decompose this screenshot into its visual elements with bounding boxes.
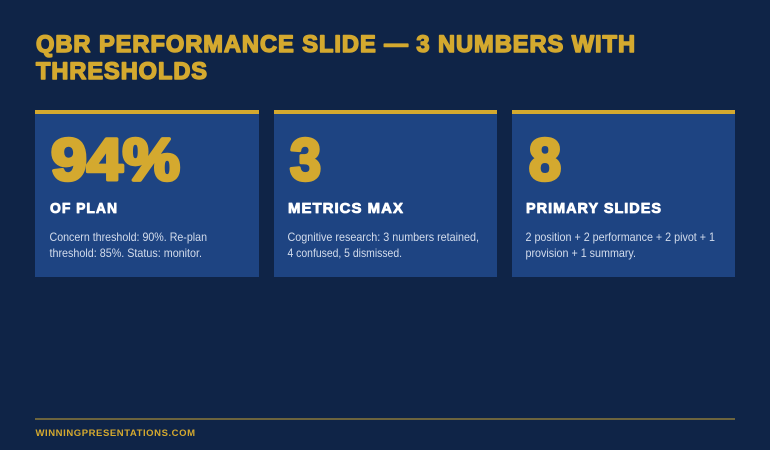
title: THRESHOLDS	[36, 58, 208, 85]
big number: 8: 8	[529, 127, 561, 193]
description: primary slides: provision + 1 summary.	[526, 246, 636, 260]
title: QBR PERFORMANCE SLIDE — 3 NUMBERS WITH	[36, 31, 636, 58]
footer: WINNINGPRESENTATIONS.COM	[36, 428, 195, 439]
description: primary slides: 2 position + 2 performance + 2 pivot + 1	[526, 230, 715, 244]
label: metrics max: METRICS MAX	[288, 201, 404, 217]
panel: metrics max	[274, 110, 497, 277]
title	[36, 31, 636, 85]
description: of plan: threshold: 85%. Status: monitor.	[50, 246, 202, 260]
description: primary slides	[526, 230, 715, 260]
label: of plan: OF PLAN	[50, 201, 118, 217]
description: metrics max: Cognitive research: 3 numbers retained,	[288, 230, 479, 244]
panel: primary slides	[512, 110, 735, 277]
label: primary slides: PRIMARY SLIDES	[526, 201, 662, 217]
panel: of plan	[35, 110, 259, 277]
description: of plan	[50, 230, 207, 260]
description: metrics max	[288, 230, 479, 260]
description: metrics max: 4 confused, 5 dismissed.	[288, 246, 402, 260]
description: of plan: Concern threshold: 90%. Re-plan	[50, 230, 207, 244]
big number: 3: 3	[290, 127, 321, 193]
big number: 94%: 94%	[51, 127, 180, 193]
